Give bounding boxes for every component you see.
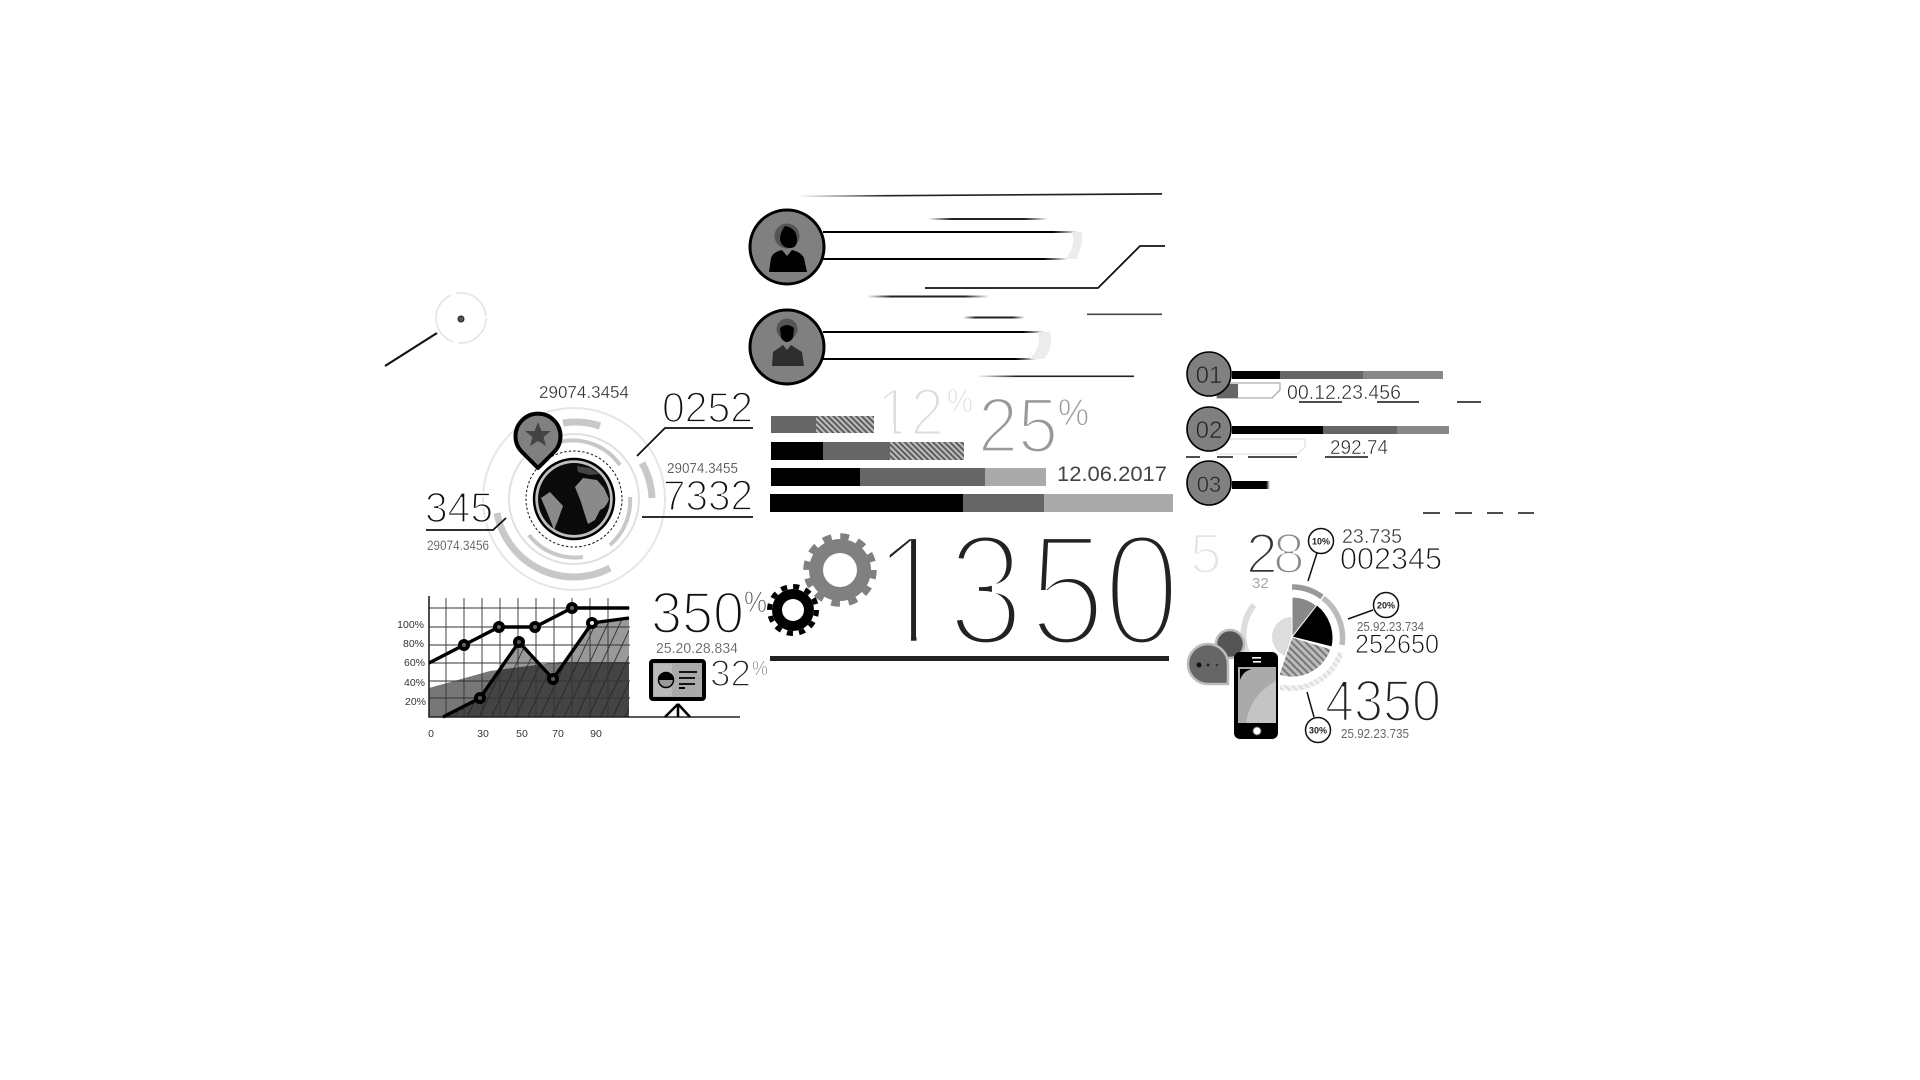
value 0252 [637,384,753,456]
value 57 28: 2 [1246,522,1278,586]
value 25%: 25 [978,381,1058,469]
value 57 28: 5 [1190,522,1222,586]
value 4350: 4350 [1325,669,1441,734]
icon: smartphone [1234,652,1278,739]
value 7332: 7332 [663,472,753,520]
icon: location pin with star [516,414,560,468]
chart line 1 [429,604,629,663]
y axis labels: 60% [404,657,425,669]
x axis labels: 90 [590,728,602,740]
chart areas [429,610,629,717]
x axis labels: 50 [516,728,528,740]
icon: black gear [770,586,816,634]
motion line [963,316,1025,318]
y axis labels: 20% [405,696,426,708]
motion line [977,376,1134,377]
value 002345: 002345 [1340,541,1442,576]
icon: globe [534,459,614,539]
row 02 [1186,407,1449,459]
value 345: 345 [425,484,493,532]
connector line [925,246,1165,288]
bar 4 [770,494,1173,512]
value 29074.3455: 29074.3455 [667,461,738,477]
value 252650: 252650 [1355,629,1439,659]
value 12%: % [947,382,973,419]
value 32%: 32 [710,653,751,694]
row 03: 03 [1197,472,1221,497]
panel: numbered list [1186,352,1534,513]
motion line [928,218,1048,220]
date 12.06.2017: 12.06.2017 [1057,463,1167,486]
panel: globe with metrics [425,382,753,590]
value 57 28: 8 [1273,522,1305,586]
icon: gray gear [806,536,874,604]
value 350%: % [744,586,767,619]
icon: presentation board [651,661,704,717]
bar 2 [771,442,964,460]
value 25%: % [1058,392,1089,434]
pie chart [1243,587,1343,688]
value 57 28: 32 [1252,575,1269,592]
motion line [867,296,989,298]
30% callout [1306,692,1330,742]
bar 3 [771,468,1046,486]
row 02: 292.74 [1330,437,1388,459]
chart line 2 [443,618,629,717]
value 25.92.23.735: 25.92.23.735 [1341,726,1409,741]
20% callout [1348,592,1398,619]
row 01 [1187,352,1481,404]
y axis labels [397,619,426,708]
decorative motion line [797,193,1162,197]
value 12%: 12 [877,375,944,450]
value 32%: % [752,658,768,680]
y axis labels: 100% [397,619,424,631]
value 1350: 1350 [873,500,1180,679]
x axis labels: 0 [428,728,434,740]
value 29074.3454: 29074.3454 [539,382,629,402]
bar 1 [771,416,874,433]
dashes [1423,512,1534,514]
line and area chart [397,596,740,740]
row 01: 01 [1196,362,1222,389]
30% callout: 30% [1309,726,1327,736]
row 01: 00.12.23.456 [1287,382,1401,404]
avatar: woman [750,210,1082,284]
motion line [1087,314,1162,315]
magnifier target icon [385,293,486,366]
y axis labels: 40% [404,677,425,689]
x axis labels: 70 [552,728,564,740]
20% callout: 20% [1377,600,1395,610]
stacked bars [770,416,1173,512]
value 350%: 350 [651,581,744,646]
y axis labels: 80% [403,638,424,650]
avatar: man [750,310,1051,384]
value 29074.3456: 29074.3456 [427,538,489,553]
10% callout: 10% [1312,536,1330,546]
value 25.20.28.834: 25.20.28.834 [656,640,738,657]
value 57 28 [1190,522,1305,592]
globe rings [483,408,665,590]
panel: people [750,193,1165,384]
row 02: 02 [1196,417,1222,444]
underline for 1350 [770,656,1169,661]
value 23.735: 23.735 [1342,526,1402,548]
row 03 [1187,461,1270,505]
value 25.92.23.734: 25.92.23.734 [1357,619,1424,634]
10% callout [1308,528,1334,581]
outer ring segments [1280,587,1343,688]
x axis labels: 30 [477,728,489,740]
pie slices [1279,597,1333,677]
x axis labels [428,728,602,740]
value 0252: 0252 [662,384,753,432]
chart axes [429,596,740,717]
icon: speech bubbles [1188,630,1244,684]
